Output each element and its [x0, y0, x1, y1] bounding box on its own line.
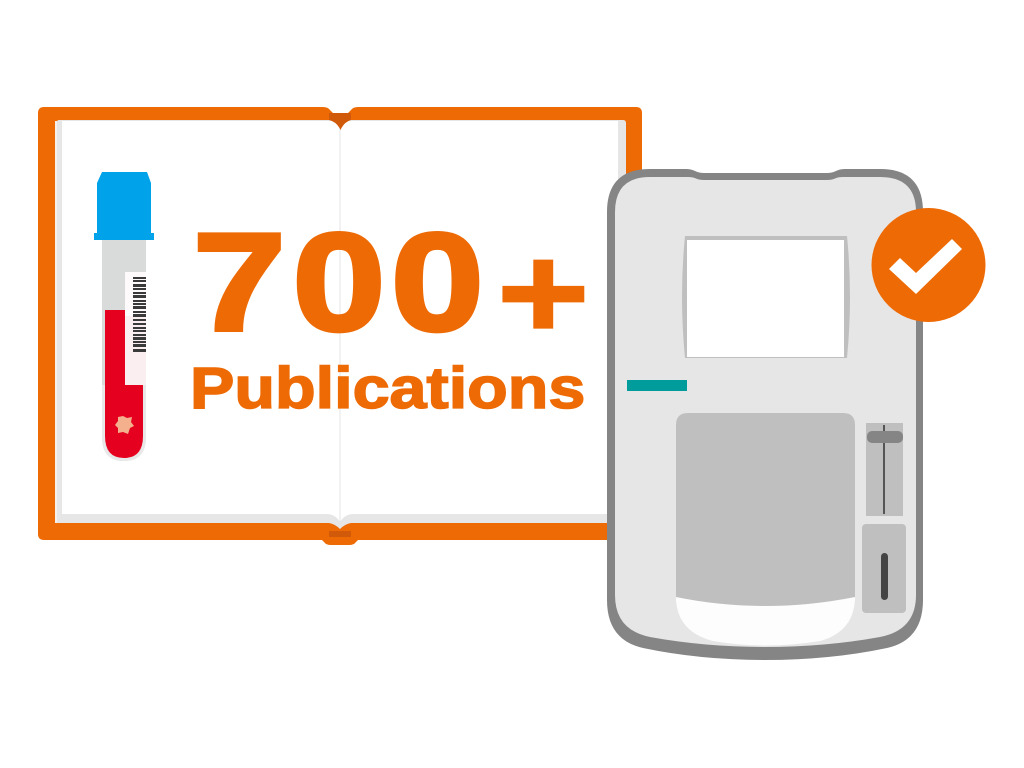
slot panel [862, 524, 906, 613]
tube body [102, 238, 146, 461]
statistic: 700+: 700 [193, 204, 484, 360]
spine bottom [329, 531, 351, 537]
icon: check badge [872, 208, 986, 322]
white left margin [55, 121, 57, 523]
screen [687, 240, 844, 357]
tube cap [94, 172, 154, 240]
icon: blood sample tube [94, 172, 154, 461]
tube label [125, 272, 146, 385]
book spine top [329, 113, 351, 130]
screen bezel [682, 236, 850, 358]
tube lower glass [102, 385, 146, 461]
teal indicator [627, 380, 687, 391]
page fold [339, 125, 341, 522]
device outer shell [607, 169, 923, 660]
drawer panel [676, 413, 855, 606]
sample drawer [676, 413, 855, 646]
blood [105, 310, 143, 458]
open book [38, 107, 642, 545]
book pages [57, 120, 626, 529]
device face [615, 177, 916, 647]
analyser device [607, 169, 923, 660]
clot [115, 416, 134, 434]
drawer white lip [676, 590, 855, 646]
white page surface [62, 121, 618, 522]
slider panel [866, 423, 903, 516]
book cover [38, 107, 642, 545]
label: Publications: Publications [190, 357, 585, 421]
statistic: 700+: + [497, 218, 589, 366]
barcode [133, 277, 146, 352]
